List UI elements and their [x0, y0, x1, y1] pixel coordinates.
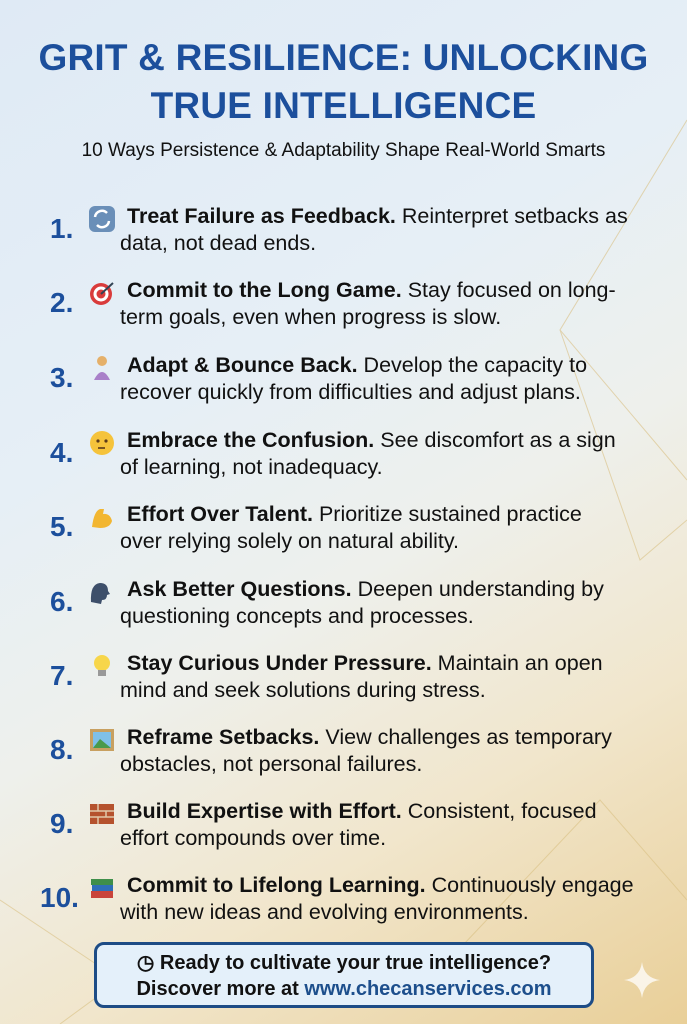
icon: sparkle [624, 962, 660, 998]
item 9: effort compounds over time. [120, 826, 386, 850]
icon: bulb [94, 655, 110, 676]
item 7: Stay Curious Under Pressure. Maintain an open [127, 651, 603, 675]
item 4: 4. [50, 437, 73, 468]
item 2 [50, 278, 616, 329]
item 4: Embrace the Confusion. See discomfort as a sign [127, 428, 616, 452]
icon: repeat [89, 206, 115, 232]
item 10 [40, 873, 634, 924]
icon: picture [90, 729, 114, 751]
icon: speaking head [90, 583, 110, 604]
item 9: Build Expertise with Effort. Consistent, focused [127, 799, 597, 823]
item 1: 1. [50, 213, 73, 244]
item 4: of learning, not inadequacy. [120, 455, 383, 479]
item 9: 9. [50, 808, 73, 839]
icon: books [91, 879, 113, 898]
footer callout [94, 942, 594, 1008]
item 10: Commit to Lifelong Learning. Continuously engage [127, 873, 634, 897]
item 8: Reframe Setbacks. View challenges as temporary [127, 725, 612, 749]
item 5 [50, 502, 582, 553]
item 5: 5. [50, 511, 73, 542]
item 7: 7. [50, 660, 73, 691]
item 6: questioning concepts and processes. [120, 604, 474, 628]
item 7 [50, 651, 603, 702]
item 10: with new ideas and evolving environments. [120, 900, 529, 924]
icon: meditation [94, 356, 110, 380]
item 2: 2. [50, 287, 73, 318]
item 6: 6. [50, 586, 73, 617]
footer callout: ◷ Ready to cultivate your true intelligence? [137, 952, 551, 974]
item 1: data, not dead ends. [120, 231, 316, 255]
title [39, 37, 648, 126]
item 6: Ask Better Questions. Deepen understanding by [127, 577, 604, 601]
item 8: 8. [50, 734, 73, 765]
item 5: over relying solely on natural ability. [120, 529, 459, 553]
item 6 [50, 577, 604, 628]
item 3: 3. [50, 362, 73, 393]
icon: thinking face [90, 431, 114, 455]
icon: bricks [90, 804, 114, 824]
item 8 [50, 725, 612, 776]
item 3: recover quickly from difficulties and adjust plans. [120, 380, 581, 404]
item 1: Treat Failure as Feedback. Reinterpret setbacks as [127, 204, 628, 228]
item 7: mind and seek solutions during stress. [120, 678, 486, 702]
title: TRUE INTELLIGENCE [151, 85, 536, 126]
item 3: Adapt & Bounce Back. Develop the capacity to [127, 353, 587, 377]
subtitle: 10 Ways Persistence & Adaptability Shape Real-World Smarts [82, 140, 605, 161]
item 2: term goals, even when progress is slow. [120, 305, 501, 329]
item 2: Commit to the Long Game. Stay focused on long- [127, 278, 616, 302]
icon: target [90, 282, 114, 305]
item 8: obstacles, not personal failures. [120, 752, 422, 776]
item 4 [50, 428, 616, 479]
item 10: 10. [40, 882, 79, 913]
item 3 [50, 353, 587, 404]
item 9 [50, 799, 597, 850]
footer callout: Discover more at www.checanservices.com [136, 978, 552, 1000]
item 1 [50, 204, 628, 255]
icon: muscle [92, 509, 112, 528]
item 5: Effort Over Talent. Prioritize sustained practice [127, 502, 582, 526]
title: GRIT & RESILIENCE: UNLOCKING [39, 37, 648, 78]
